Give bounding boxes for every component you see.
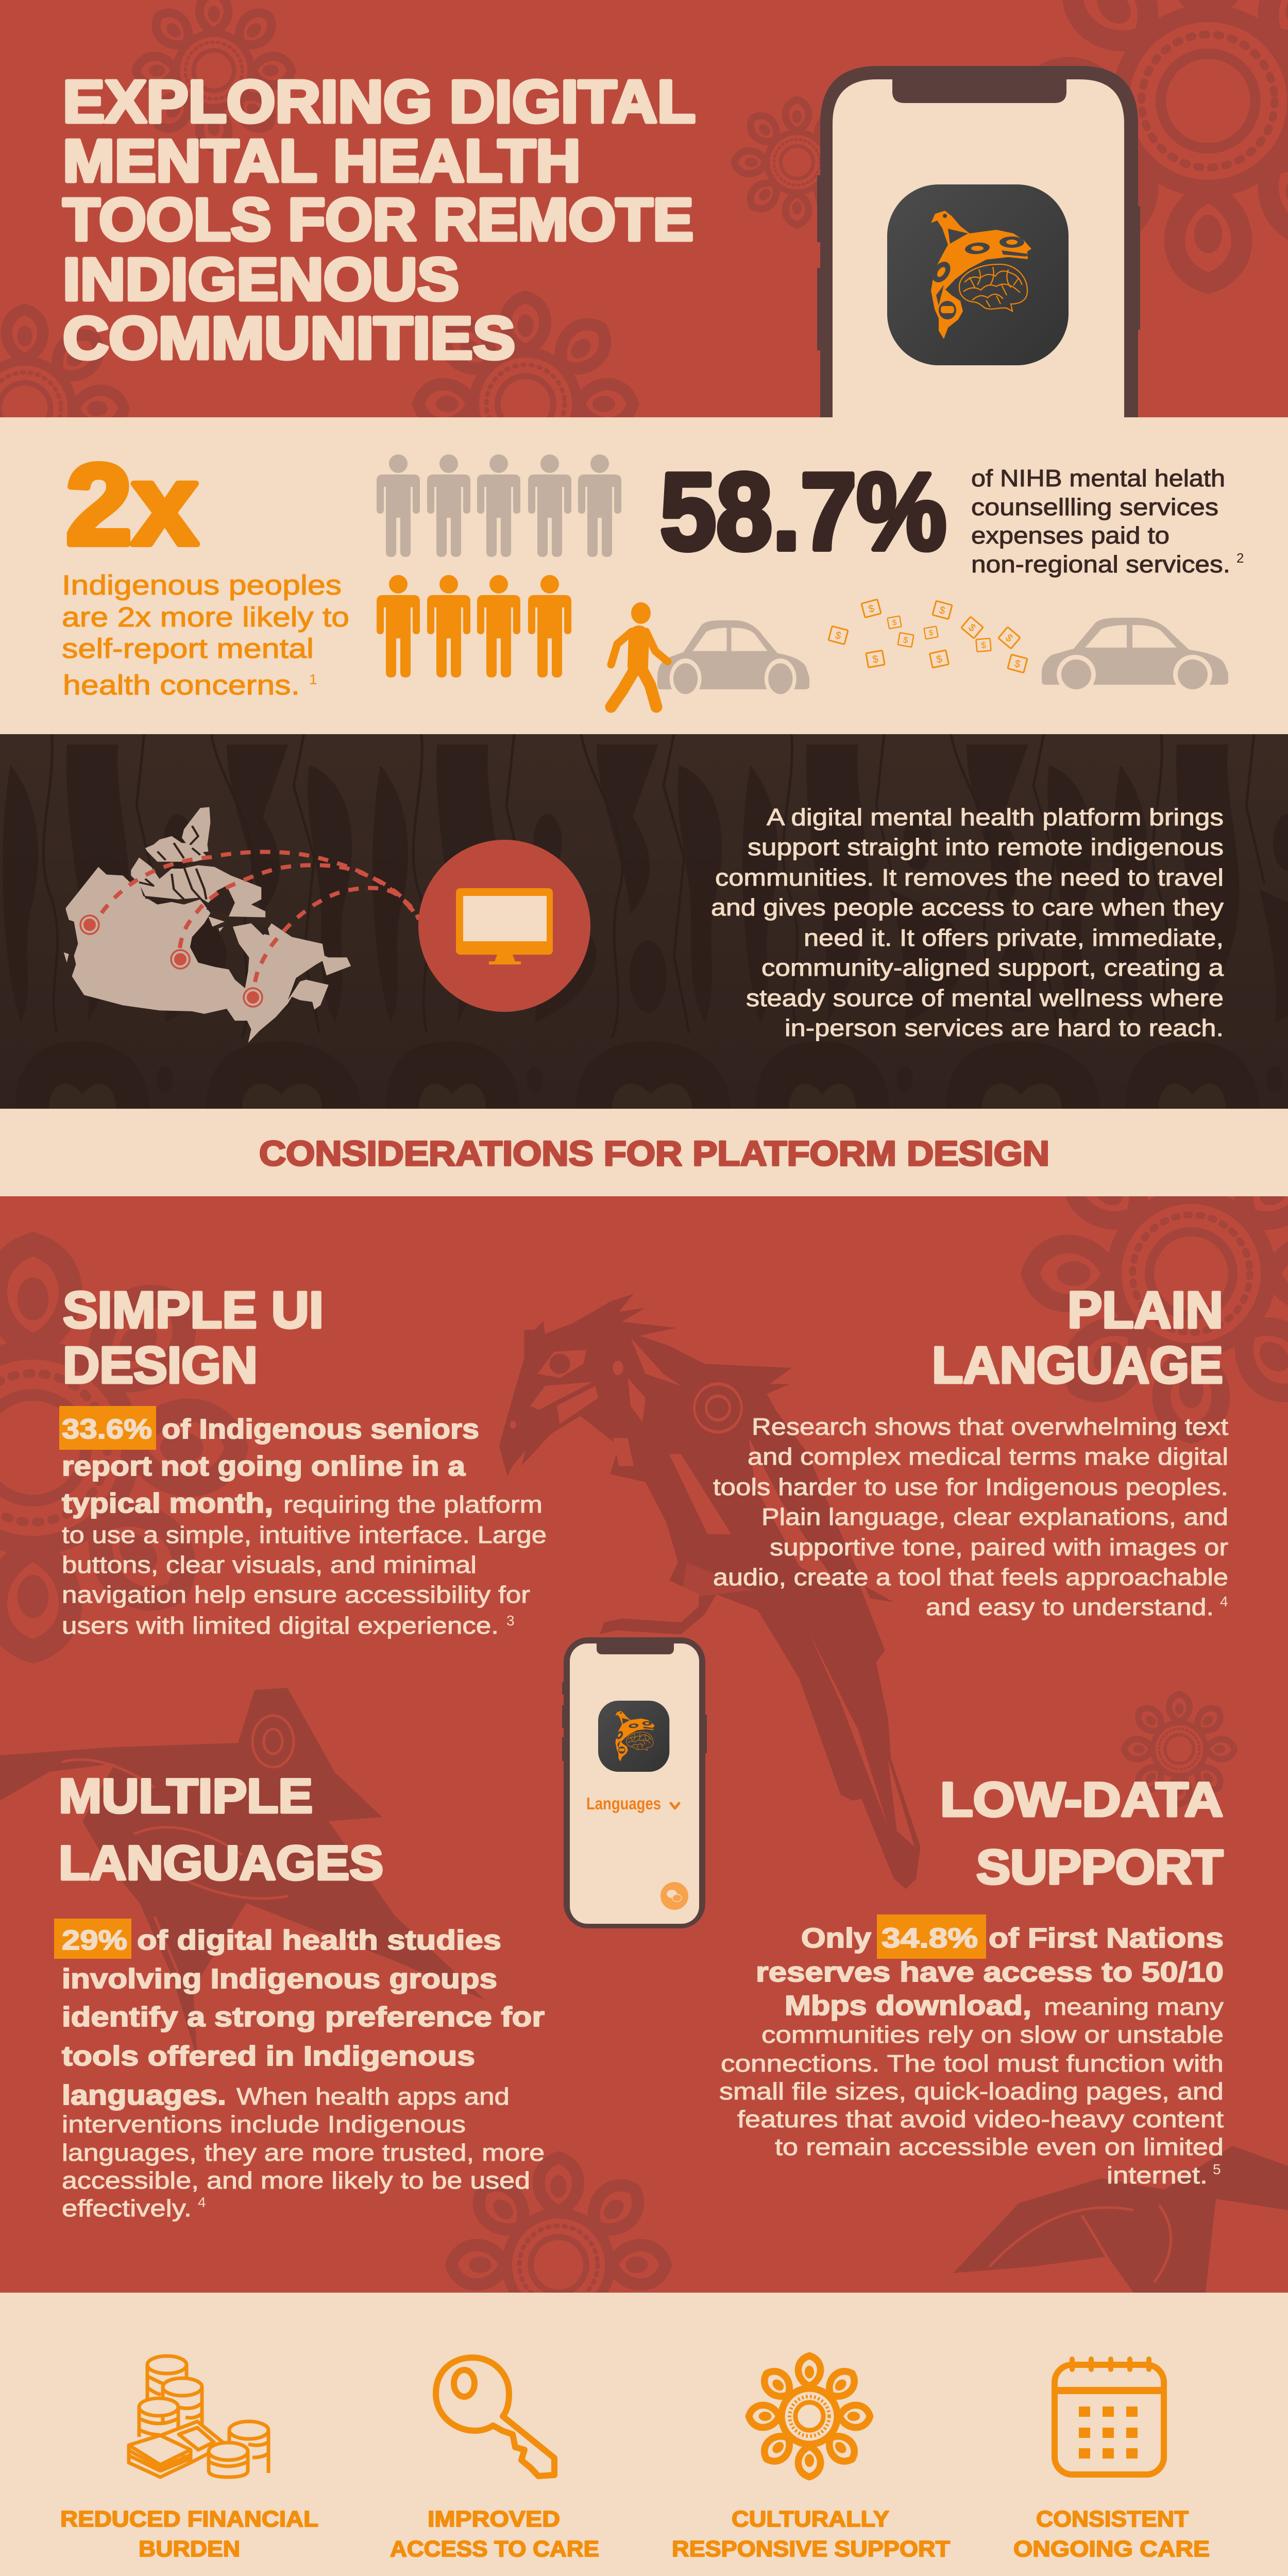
heading: ONGOING CARE bbox=[1013, 2536, 1210, 2562]
panel: statistics bbox=[0, 417, 1288, 734]
background flowers and formline animals bbox=[0, 1113, 1288, 2372]
section: multiple languages: MULTIPLE bbox=[59, 1769, 313, 1823]
section: multiple languages: involving Indigenous groups bbox=[62, 1963, 497, 1994]
phone mockup: large bbox=[817, 66, 1140, 417]
heading bbox=[672, 2506, 950, 2562]
section: low-data support: features that avoid video-heavy content bbox=[737, 2106, 1224, 2132]
text: platform description: communities. It removes the need to travel bbox=[715, 864, 1224, 891]
app icon: orca and brain bbox=[887, 184, 1069, 365]
section: plain language: supportive tone, paired with images or bbox=[770, 1534, 1228, 1561]
section: simple UI design bbox=[59, 1281, 547, 1639]
section: simple UI design: of Indigenous seniors bbox=[162, 1414, 479, 1445]
stat: 2x: self-report mental bbox=[62, 633, 314, 664]
section: low-data support: Only bbox=[801, 1923, 871, 1954]
benefit: improved access to care bbox=[378, 2358, 601, 2576]
section: multiple languages: 4 bbox=[198, 2194, 206, 2210]
heading: IMPROVED bbox=[428, 2506, 560, 2532]
chat button bbox=[660, 1882, 688, 1910]
text: platform description: and gives people access to care when they bbox=[711, 894, 1224, 921]
section: simple UI design: SIMPLE UI bbox=[63, 1281, 324, 1339]
stat: 2x: are 2x more likely to bbox=[62, 602, 349, 633]
section: multiple languages: languages, they are more trusted, more bbox=[62, 2139, 545, 2166]
heading: considerations: CONSIDERATIONS FOR PLATFORM DESIGN bbox=[259, 1134, 1049, 1173]
section: plain language: audio, create a tool that feels approachable bbox=[713, 1564, 1228, 1590]
heading: BURDEN bbox=[139, 2536, 240, 2562]
heading: ACCESS TO CARE bbox=[390, 2536, 599, 2562]
phone mockup: small with language selector bbox=[562, 1637, 707, 1928]
heading bbox=[60, 2506, 318, 2562]
section: simple UI design: DESIGN bbox=[63, 1336, 258, 1394]
title bbox=[63, 68, 696, 371]
panel: benefits bbox=[0, 2293, 1288, 2576]
section: plain language bbox=[713, 1281, 1228, 1620]
icon: car left bbox=[657, 620, 809, 699]
icon: walking person bbox=[611, 602, 668, 707]
heading: RESPONSIVE SUPPORT bbox=[672, 2536, 950, 2562]
benefit: reduced financial burden bbox=[60, 2356, 318, 2576]
section: plain language: and complex medical terms make digital bbox=[748, 1443, 1228, 1470]
icon: coins and bills bbox=[129, 2356, 268, 2477]
title: EXPLORING DIGITAL bbox=[63, 68, 696, 135]
section: low-data support bbox=[719, 1772, 1224, 2189]
section: low-data support: of First Nations bbox=[989, 1923, 1224, 1954]
text: platform description: community-aligned support, creating a bbox=[761, 954, 1224, 981]
section: multiple languages: interventions include Indigenous bbox=[62, 2111, 466, 2138]
highlight: 34.8% bbox=[877, 1914, 986, 1959]
section: simple UI design: report not going online in a bbox=[62, 1451, 466, 1482]
section: low-data support: small file sizes, quick-loading pages, and bbox=[719, 2078, 1224, 2105]
section: multiple languages: of digital health studies bbox=[137, 1925, 501, 1956]
section: simple UI design: requiring the platform bbox=[283, 1491, 543, 1518]
stat: 2x bbox=[62, 441, 349, 701]
section: low-data support: 5 bbox=[1213, 2161, 1221, 2177]
stat: 58.7%: expenses paid to bbox=[971, 522, 1170, 549]
section: low-data support: LOW-DATA bbox=[940, 1772, 1223, 1826]
panel: header bbox=[0, 0, 1288, 417]
section: simple UI design: users with limited digital experience. bbox=[62, 1612, 499, 1639]
section: multiple languages bbox=[54, 1769, 545, 2222]
title: COMMUNITIES bbox=[63, 304, 515, 371]
highlight: 33.6% bbox=[59, 1406, 156, 1450]
section: multiple languages: LANGUAGES bbox=[59, 1836, 383, 1890]
title: TOOLS FOR REMOTE bbox=[63, 186, 693, 253]
section: low-data support: internet. bbox=[1107, 2162, 1208, 2189]
stat: 58.7%: non-regional services. bbox=[971, 551, 1230, 578]
stat: 2x: 1 bbox=[309, 671, 317, 687]
text: platform description: need it. It offers private, immediate, bbox=[804, 924, 1224, 951]
section: low-data support: 34.8% bbox=[882, 1923, 978, 1954]
section: low-data support: SUPPORT bbox=[976, 1840, 1223, 1894]
text: platform description: in-person services are hard to reach. bbox=[785, 1014, 1224, 1041]
benefit: consistent ongoing care bbox=[994, 2357, 1227, 2576]
background flowers: header bbox=[0, 0, 1288, 417]
panel: digital platform explainer bbox=[0, 734, 1288, 1109]
text: platform description: steady source of mental wellness where bbox=[746, 985, 1224, 1011]
stat: 58.7%: 58.7% bbox=[660, 450, 946, 572]
section: simple UI design: typical month, bbox=[62, 1488, 273, 1519]
language dropdown: Languages bbox=[586, 1794, 661, 1813]
heading bbox=[1013, 2506, 1210, 2562]
stat: 58.7%: of NIHB mental helath bbox=[971, 465, 1225, 492]
section: simple UI design: buttons, clear visuals, and minimal bbox=[62, 1551, 477, 1578]
section: low-data support: communities rely on slow or unstable bbox=[761, 2021, 1224, 2048]
section: multiple languages: effectively. bbox=[62, 2195, 192, 2222]
highlight: 29% bbox=[54, 1919, 131, 1959]
stat: 58.7%: 2 bbox=[1236, 550, 1244, 566]
panel: considerations heading band bbox=[0, 1109, 1288, 1196]
section: multiple languages: tools offered in Indigenous bbox=[62, 2041, 475, 2072]
map: Canada with routes bbox=[64, 807, 419, 1043]
section: simple UI design: 3 bbox=[506, 1613, 515, 1629]
heading bbox=[390, 2506, 599, 2562]
stat: 2x: Indigenous peoples bbox=[62, 570, 342, 601]
panel: platform design considerations bbox=[0, 1196, 1288, 2293]
section: low-data support: reserves have access to 50/10 bbox=[756, 1957, 1224, 1988]
title: INDIGENOUS bbox=[63, 246, 459, 313]
section: plain language: LANGUAGE bbox=[932, 1336, 1223, 1394]
benefit: culturally responsive support bbox=[672, 2355, 950, 2576]
text: platform description bbox=[711, 804, 1224, 1041]
icon: flying money bbox=[828, 599, 1027, 673]
section: plain language: tools harder to use for Indigenous peoples. bbox=[713, 1473, 1228, 1500]
icon: calendar bbox=[1055, 2357, 1164, 2475]
stat: 2x: health concerns. bbox=[63, 670, 300, 701]
text: platform description: support straight into remote indigenous bbox=[748, 834, 1224, 860]
section: multiple languages: identify a strong preference for bbox=[62, 2002, 545, 2032]
section: simple UI design: to use a simple, intuitive interface. Large bbox=[62, 1521, 547, 1548]
pictogram: people bbox=[377, 454, 621, 677]
title: MENTAL HEALTH bbox=[63, 127, 581, 194]
section: plain language: PLAIN bbox=[1067, 1281, 1223, 1339]
section: low-data support: Mbps download, bbox=[785, 1990, 1031, 2021]
heading: CONSISTENT bbox=[1036, 2506, 1189, 2532]
icon: key bbox=[436, 2358, 554, 2476]
icon: car right bbox=[1042, 618, 1228, 694]
stat: 58.7% bbox=[660, 450, 1244, 578]
section: multiple languages: 29% bbox=[62, 1925, 127, 1956]
icon: flower bbox=[749, 2355, 870, 2477]
section: multiple languages: languages. bbox=[62, 2080, 226, 2111]
section: multiple languages: When health apps and bbox=[236, 2083, 510, 2110]
stat: 2x: 2x bbox=[66, 441, 198, 569]
section: low-data support: to remain accessible even on limited bbox=[775, 2133, 1224, 2160]
section: simple UI design: 33.6% bbox=[62, 1414, 152, 1445]
app icon: small bbox=[598, 1701, 669, 1772]
section: plain language: Plain language, clear explanations, and bbox=[761, 1503, 1228, 1530]
section: plain language: and easy to understand. bbox=[926, 1594, 1214, 1620]
section: plain language: Research shows that overwhelming text bbox=[752, 1413, 1228, 1440]
heading: CULTURALLY bbox=[732, 2506, 889, 2532]
stat: 58.7%: counsellling services bbox=[971, 494, 1218, 520]
section: low-data support: connections. The tool must function with bbox=[721, 2050, 1224, 2077]
icon: monitor in circle bbox=[418, 840, 590, 1012]
section: simple UI design: navigation help ensure accessibility for bbox=[62, 1581, 530, 1608]
section: multiple languages: accessible, and more likely to be used bbox=[62, 2167, 530, 2194]
section: low-data support: meaning many bbox=[1044, 1993, 1224, 2020]
section: plain language: 4 bbox=[1220, 1594, 1228, 1609]
heading: REDUCED FINANCIAL bbox=[60, 2506, 318, 2532]
text: platform description: A digital mental health platform brings bbox=[767, 804, 1224, 831]
